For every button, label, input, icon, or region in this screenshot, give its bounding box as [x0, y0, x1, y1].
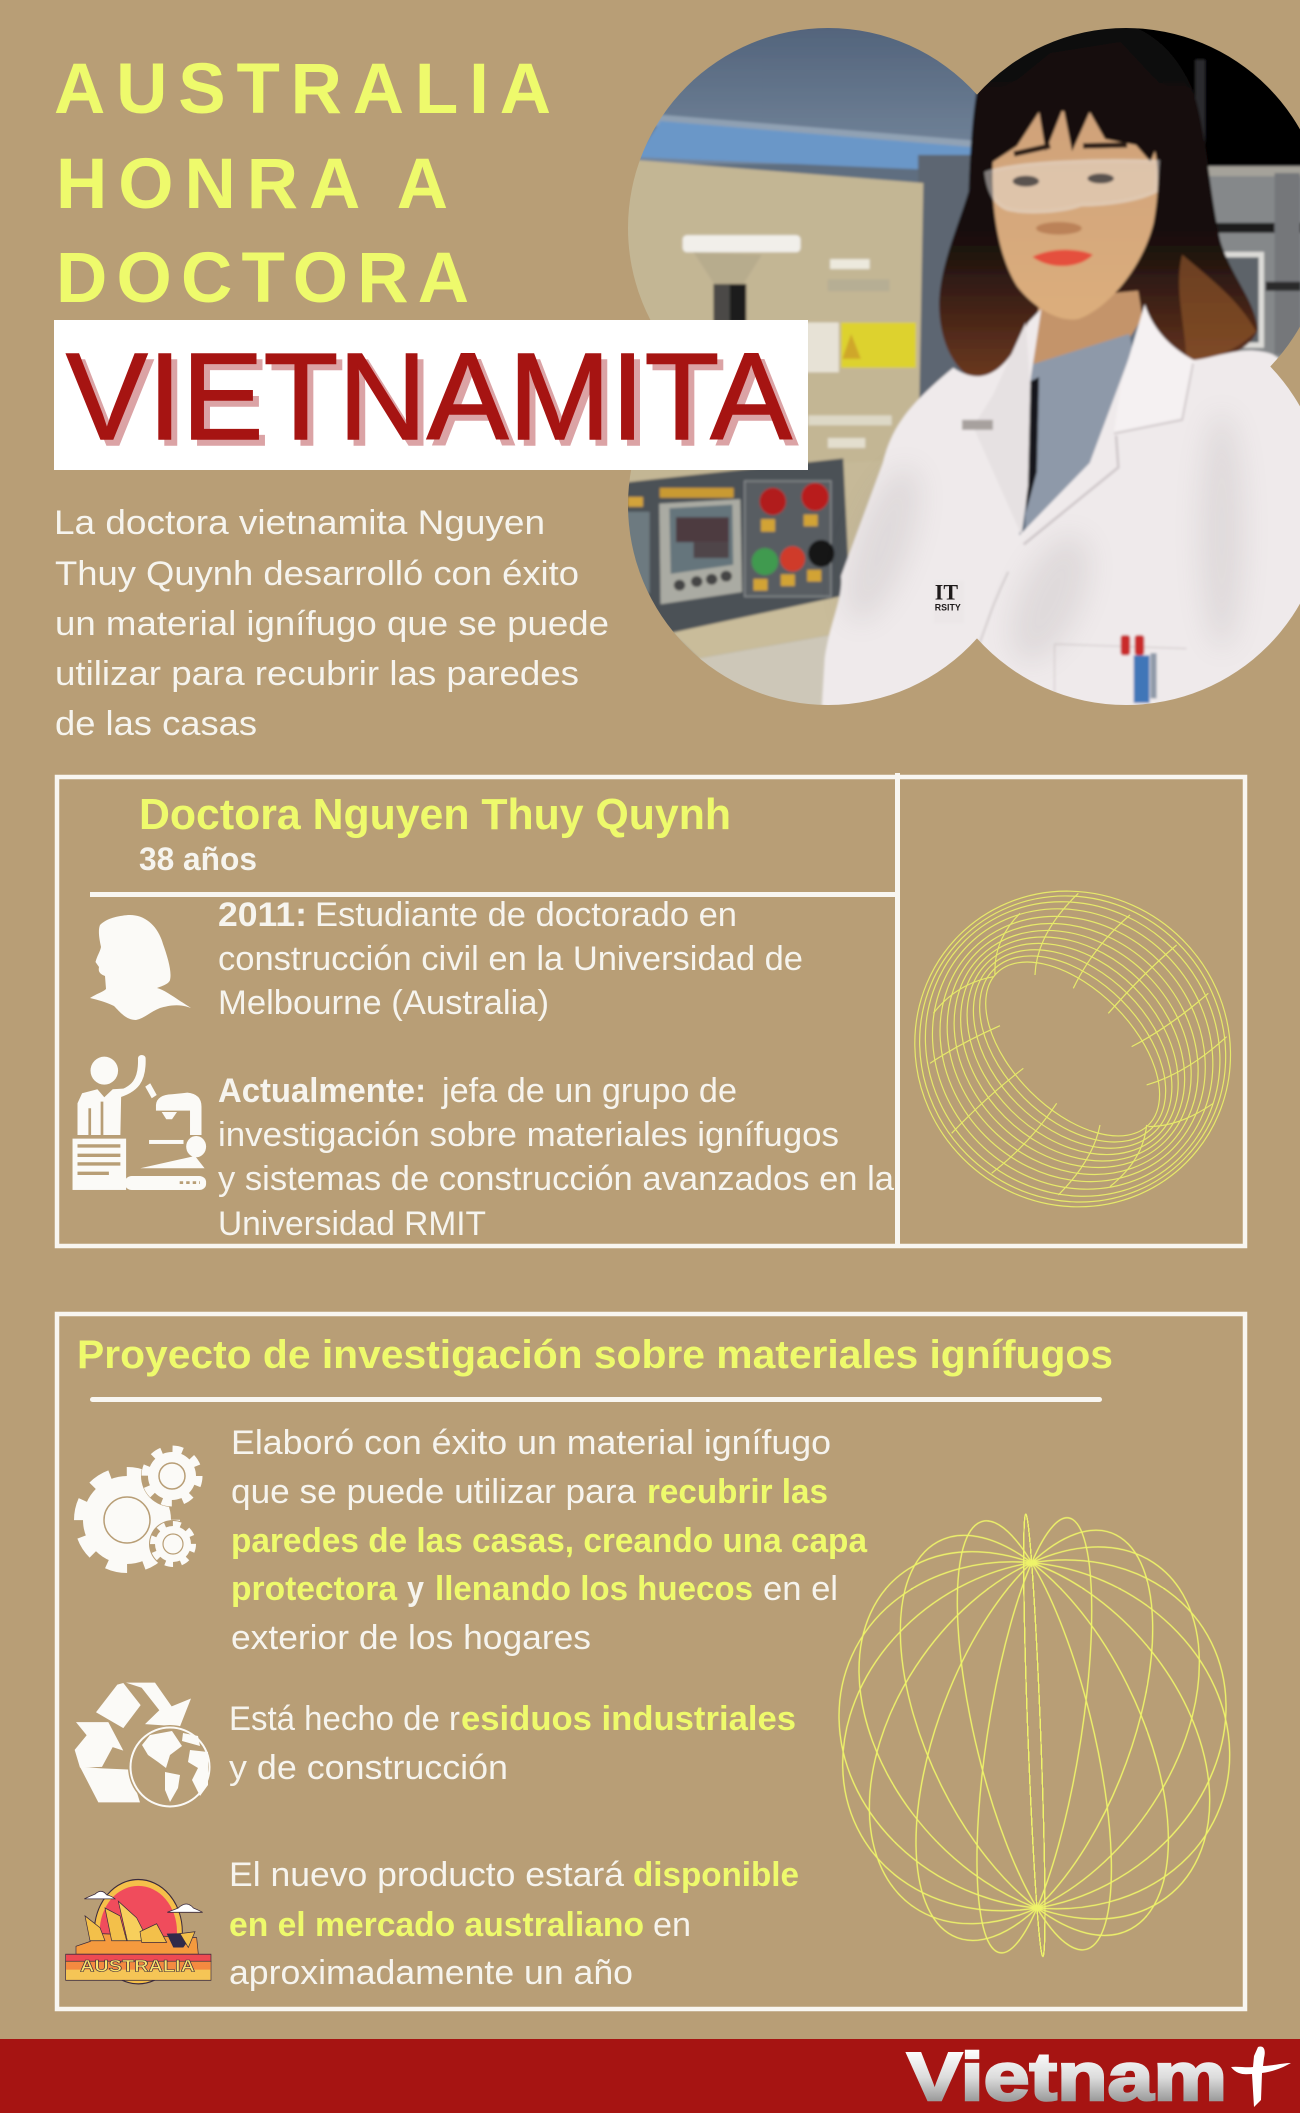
- project heading: Proyecto de investigación sobre materiales ignífugos: [77, 1333, 1113, 1377]
- text: market availability: en: [653, 1906, 691, 1944]
- icon: Australia Sydney Opera badge: [66, 1879, 211, 1984]
- text: industrial waste: esiduos industriales: [461, 1700, 796, 1738]
- title: Australia honra a doctora: AUSTRALIA: [54, 50, 551, 129]
- footer logo: Vietnam+: Vietnam: [907, 2039, 1227, 2113]
- text: 2011: construcción civil en la Universidad de: [218, 940, 803, 978]
- profile name: Doctora Nguyen Thuy Quynh: [139, 790, 731, 839]
- text: material use: Elaboró con éxito un material ignífugo: [231, 1424, 831, 1462]
- text: market availability: disponible: [633, 1856, 799, 1894]
- text: current position: Universidad RMIT: [218, 1205, 486, 1243]
- text: material use: recubrir las: [647, 1473, 828, 1511]
- intro paragraph: Thuy Quynh desarrolló con éxito: [55, 555, 579, 593]
- footer band: [0, 2039, 1300, 2113]
- text: current position: [218, 1072, 894, 1243]
- photo: coat logo: RSITY: [935, 602, 961, 613]
- text: material use: que se puede utilizar para: [231, 1473, 636, 1511]
- graphic: wireframe meridian sphere: [836, 1425, 1232, 2046]
- text: 2011: Estudiante de doctorado en: [315, 896, 737, 934]
- text: industrial waste: Está hecho de r: [229, 1700, 460, 1738]
- text: industrial waste: y de construcción: [229, 1749, 508, 1787]
- text: material use: exterior de los hogares: [231, 1619, 591, 1657]
- title banner: VIETNAMITA: VIETNAMITA: [72, 335, 798, 472]
- text: current position: jefa de un grupo de: [441, 1072, 737, 1110]
- text: material use: llenando los huecos: [435, 1570, 753, 1608]
- intro paragraph: La doctora vietnamita Nguyen: [54, 504, 545, 542]
- text: material use: y: [407, 1570, 424, 1608]
- photo: researcher in laboratory: [628, 28, 1300, 705]
- profile age: 38 años: [139, 841, 257, 877]
- text: market availability: [229, 1856, 799, 1992]
- text: market availability: aproximadamente un año: [229, 1954, 633, 1992]
- text: market availability: El nuevo producto estará: [229, 1856, 624, 1894]
- icon: Australia Sydney Opera badge: AUSTRALIA: [80, 1958, 195, 1976]
- text: market availability: en el mercado australiano: [229, 1906, 644, 1944]
- photo: coat logo: [935, 585, 960, 610]
- text: 2011: [218, 896, 803, 1022]
- text: current position: Actualmente:: [218, 1072, 426, 1110]
- graphic: wireframe torus sphere: [849, 826, 1296, 1272]
- panel: research project: [57, 1314, 1245, 2046]
- footer logo: Vietnam+: [907, 2039, 1291, 2113]
- icon: gears: [83, 1445, 203, 1568]
- intro paragraph: [54, 504, 609, 743]
- icon: recycling and globe: [75, 1683, 212, 1809]
- text: material use: paredes de las casas, creando una capa: [231, 1522, 868, 1560]
- title banner: VIETNAMITA: VIETNAMITA: [66, 329, 792, 466]
- intro paragraph: utilizar para recubrir las paredes: [55, 655, 579, 693]
- icon: scientist with microscope: [73, 1057, 206, 1190]
- text: current position: investigación sobre materiales ignífugos: [218, 1116, 839, 1154]
- text: material use: protectora: [231, 1570, 398, 1608]
- intro paragraph: un material ignífugo que se puede: [55, 605, 609, 643]
- panel: doctor profile: [57, 773, 1296, 1272]
- text: 2011: 2011:: [218, 896, 307, 934]
- title: Australia honra a doctora: DOCTORA: [56, 239, 469, 318]
- text: material use: [231, 1424, 868, 1657]
- icon: woman silhouette: [90, 915, 191, 1020]
- text: industrial waste: [229, 1700, 796, 1787]
- title: Australia honra a doctora: HONRA A: [56, 145, 448, 224]
- text: material use: en el: [763, 1570, 838, 1608]
- text: 2011: Melbourne (Australia): [218, 984, 549, 1022]
- intro paragraph: de las casas: [55, 705, 257, 743]
- text: current position: y sistemas de construcción avanzados en la: [218, 1160, 894, 1198]
- photo: coat logo: IT: [935, 579, 958, 605]
- title: Australia honra a doctora: [54, 50, 551, 318]
